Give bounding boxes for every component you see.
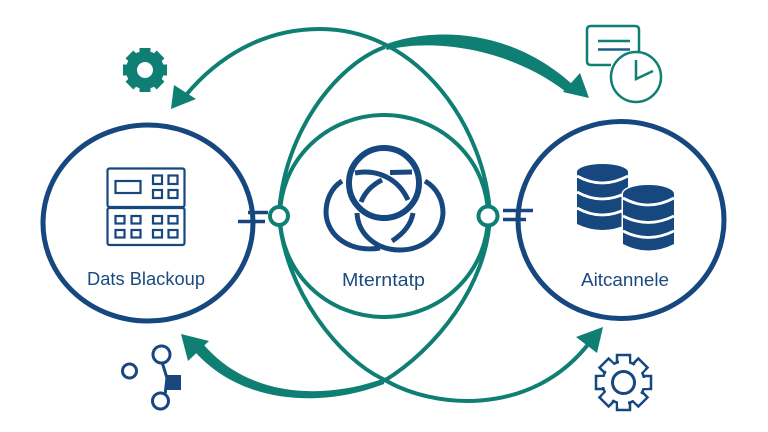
icon: server rack [108, 168, 184, 245]
panel: right circle [518, 122, 724, 318]
arrow: top right [279, 34, 589, 215]
panel: left circle [43, 125, 253, 321]
icon: interlocking rings [326, 148, 443, 250]
panel: center icon and label [326, 148, 443, 290]
icon: solid teal gear [123, 48, 167, 92]
icon: node network [122, 346, 181, 409]
connector: right [478, 206, 533, 226]
icon: database stacks [577, 164, 674, 250]
icon: message card and clock [587, 26, 661, 102]
arrow: bottom left [181, 215, 490, 398]
panel: center circle [280, 115, 488, 317]
label: center: Mterntatp [342, 270, 425, 290]
label: left circle: Dats Blackoup [87, 269, 205, 289]
icon: outlined gear [596, 355, 651, 410]
arrow: bottom right [279, 215, 603, 401]
arrow: top left [171, 29, 490, 215]
connector: left [238, 207, 288, 225]
label: right circle: Aitcannele [581, 270, 669, 290]
